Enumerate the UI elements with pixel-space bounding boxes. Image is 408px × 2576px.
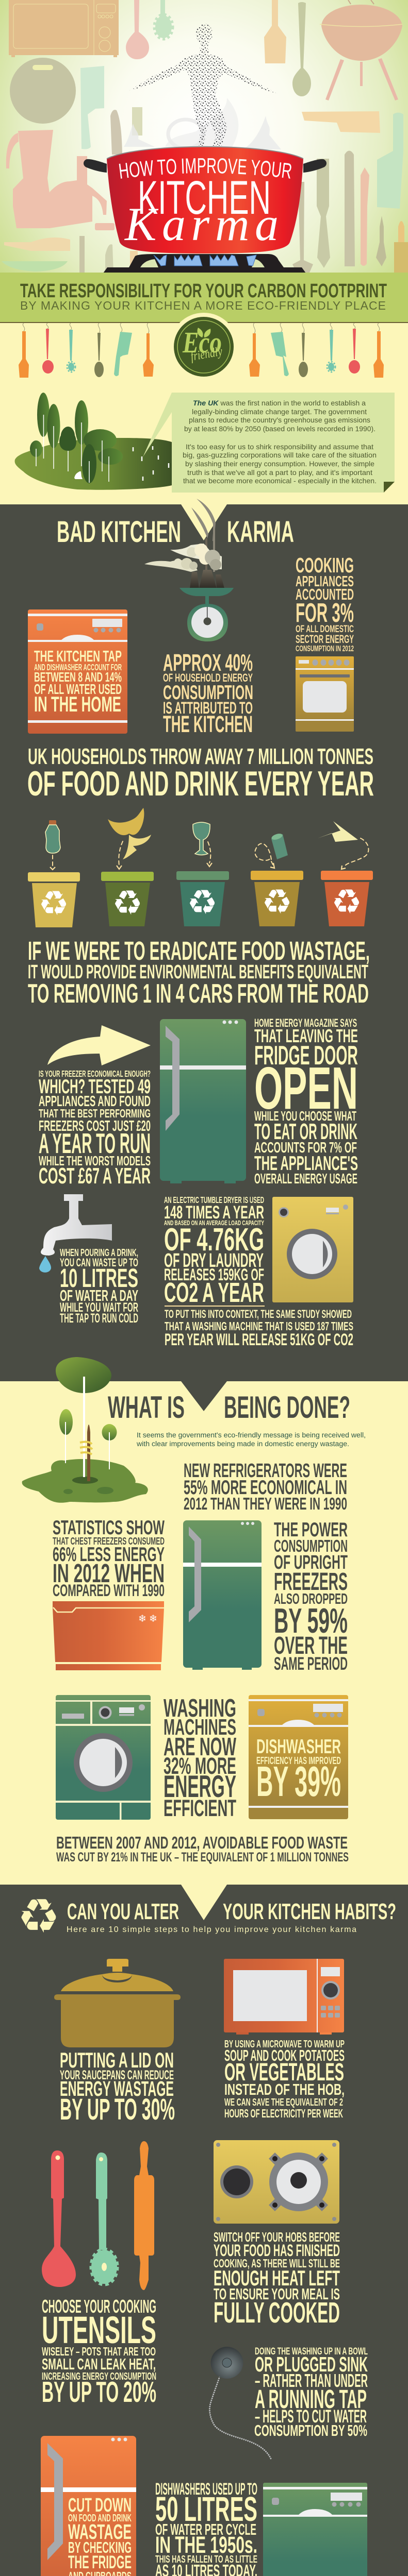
utensils text: SMALL CAN LEAK HEAT, [42,2355,156,2373]
steam rising from pot [124,98,281,149]
freezer text: WHICH? TESTED 49 [39,1076,151,1098]
hob [214,2140,339,2224]
saucepan text: BY UP TO 30% [60,2093,175,2126]
heading: KARMA [227,515,294,549]
rolling pin [134,2141,154,2290]
upright freezer statistic: FREEZERS [274,1568,348,1596]
body text: big, gas-guzzling corporations will take care of the situation [183,451,377,459]
pot title [119,158,291,250]
saucepan text: ENERGY WASTAGE [60,2077,174,2100]
freezer text: APPLIANCES AND FOUND [39,1093,151,1110]
yellow dishwasher with statistic: EFFICIENCY HAS IMPROVED [256,1755,341,1767]
upright freezer statistic: CONSUMPTION [274,1536,348,1555]
orange spatula right [373,331,384,378]
amber bin [251,871,303,926]
intro text: It seems the government's eco-friendly message is being received well, [137,1431,366,1439]
recycle icon: ♻ [18,1889,60,1944]
chest freezer statistic: 66% LESS ENERGY [53,1544,165,1566]
olive spoon right [299,333,308,377]
freezer text: IS YOUR FREEZER ECONOMICAL ENOUGH? [39,1069,151,1079]
orange fridge with wastage text: WASTAGE [68,2520,132,2544]
eradicate food wastage headline [28,936,370,1009]
chest freezer statistic: STATISTICS SHOW [53,1517,165,1539]
teal bin [176,871,229,926]
household energy statistic: APPROX 40% [163,649,253,676]
panel: UK climate speech bubble [143,393,395,493]
body text: that we become more economical - especially in the kitchen. [183,477,377,485]
utensil row behind pot, left [2,223,138,273]
teal gear left [67,330,75,372]
plug text [254,2346,368,2439]
yellow dishwasher with statistic: DISHWASHER [256,1736,341,1758]
teal gear right [327,330,335,372]
heading [67,1899,396,1924]
tumble dryer text: RELEASES 159KG OF [164,1265,264,1284]
upright freezer statistic: ALSO DROPPED [274,1591,348,1607]
cooking appliances statistic: CONSUMPTION IN 2012 [296,645,354,653]
panel: can you alter your kitchen habits dark section [0,1885,408,2576]
teal cleaver left [114,332,132,376]
washing machine statistic: MACHINES [164,1715,236,1740]
eco friendly badge: friendly [189,344,224,364]
yellow bin: ♻ [38,884,69,923]
washing machine statistic: 32% MORE [164,1753,236,1779]
body text: by slashing their energy consumption. However, the simple [185,460,374,468]
utensils text [42,2296,156,2409]
illustration: green landscape [15,393,172,490]
fridge door text [254,1016,358,1187]
chest freezer: ❄ [138,1613,146,1624]
body text: truth is that we've all got a part to play, and it's important [187,468,372,477]
freezer text: COST £67 A YEAR [39,1163,151,1189]
sub heading: Here are 10 simple steps to help you improve your kitchen karma [67,1925,356,1934]
saucepan text: PUTTING A LID ON [60,2048,174,2072]
dishwasher litres text: OF WATER PER CYCLE [155,2521,256,2538]
curved arrow [47,1025,151,1065]
orange dishwasher with tap statistic [28,609,127,734]
panel: green title band [0,273,408,323]
tap text: WHILE YOU WAIT FOR [60,1300,138,1315]
freezer text: A YEAR TO RUN [39,1127,151,1159]
orange spatula left [19,331,29,378]
washing machine statistic: EFFICIENT [164,1795,236,1821]
tap text: OF WATER A DAY [60,1287,138,1304]
tall trees [30,393,123,483]
orange spatula [264,0,286,63]
cutting board [10,58,76,124]
heading [108,1390,350,1425]
cooking appliances statistic: APPLIANCES [296,573,354,590]
orange slotted turner right [249,333,260,377]
saucepan text [60,2048,175,2126]
upright freezer statistic: BY 59% [274,1601,348,1640]
cooking appliances statistic: FOR 3% [296,598,354,628]
burner stand [103,254,306,273]
cooking appliances statistic [296,553,354,653]
cooking appliances statistic: COOKING [296,553,354,577]
saucepan with lid [54,1959,181,2047]
chest freezer [53,1601,164,1670]
tree illustration [22,1357,148,1503]
upright freezer statistic [274,1519,348,1674]
right orange cleaver [302,111,380,133]
falling waste items [45,808,368,870]
drinks can [271,833,288,859]
smoking factory on scale [144,499,234,641]
green washing machine [56,1695,151,1820]
pot title: Karma [124,198,279,250]
orange dishwasher with tap statistic: THE KITCHEN TAP [34,648,122,665]
pot title: HOW TO IMPROVE YOUR [119,158,291,179]
blender [6,130,53,228]
orange bin [321,871,373,926]
avoidable food waste statistic [56,1833,349,1865]
green bin [101,872,154,926]
paper plane [318,821,358,842]
microwave text: INSTEAD OF THE HOB, [224,2081,345,2098]
cooking appliances statistic: SECTOR ENERGY [296,633,354,646]
dishwasher litres text: IN THE 1950s. [155,2532,257,2558]
panel: can you alter your kitchen habits dark section: DISHWASHERS USED UP TO [155,2480,257,2498]
freezer text: WHILE THE WORST MODELS [39,1153,151,1168]
green fridge small [183,1520,262,1670]
orange dishwasher with tap statistic: AND DISHWASHER ACCOUNT FOR [34,662,122,672]
barbecue [320,0,402,100]
body text: plans to reduce the country's greenhouse gas emissions [189,416,370,424]
tap text [60,1247,138,1326]
body text: The UK was the first nation in the world to establish a [193,399,366,407]
orange slotted turner left [143,333,154,377]
orange fridge with wastage text: BY CHECKING [68,2539,132,2556]
freezer text: FREEZERS COST JUST £20 [39,1118,151,1134]
cooking appliances statistic: OF ALL DOMESTIC [296,624,354,635]
yellow dishwasher with statistic: BY 39% [256,1757,341,1805]
tap text: YOU CAN WASTE UP TO [60,1256,138,1269]
yellow washing machine [272,1197,353,1302]
red spoon [42,2150,76,2287]
upright freezer statistic: OF UPRIGHT [274,1552,348,1573]
tumble dryer text: AN ELECTRIC TUMBLE DRYER IS USED [164,1195,264,1205]
tumble dryer text [164,1195,353,1349]
freezer text [39,1069,151,1189]
heading: BAD KITCHEN [57,515,181,549]
kitchen scale [179,588,234,641]
tap text: 10 LITRES [60,1263,138,1293]
upright freezer statistic: OVER THE [274,1632,348,1659]
smoke clouds [144,544,222,572]
panel: what is being done cream section [22,1357,366,1865]
cooking utensils [42,2141,154,2290]
chest freezer statistic: THAT CHEST FREEZERS CONSUMED [53,1536,165,1547]
body text: It's too easy for us to shirk responsibility and assume that [186,443,373,451]
island ground [15,438,172,490]
pot handles [84,159,327,173]
hob text [214,2229,340,2329]
dishwasher litres text [155,2480,257,2576]
wine glass [193,822,210,855]
page fold [384,482,395,493]
orange bin: ♻ [331,882,362,922]
washing machine statistic [164,1694,236,1821]
yellow bin [28,872,80,927]
eco friendly badge: Eco [182,326,222,359]
orange dishwasher with tap statistic: OF ALL WATER USED [34,681,122,697]
tumble dryer text: 148 TIMES A YEAR [164,1202,264,1223]
green gear [154,0,173,39]
food processor [50,156,107,228]
background kitchen utensils [2,0,408,273]
dashed arrows [53,838,368,867]
refrigerators statistic [184,1460,347,1513]
sub headline: BY MAKING YOUR KITCHEN A MORE ECO-FRIENDLY PLACE [20,299,386,312]
tumble dryer text: CO2 A YEAR [164,1277,264,1308]
panel: hero header with pot [0,0,408,273]
household energy statistic: IS ATTRIBUTED TO [163,699,253,717]
washing machine statistic: ARE NOW [164,1733,236,1761]
panel: can you alter your kitchen habits dark section: CHOOSE YOUR COOKING [42,2296,156,2317]
utensils text: BY UP TO 20% [42,2376,156,2409]
utensils text: UTENSILS [42,2309,156,2351]
heading: CAN YOU ALTER [67,1899,179,1924]
household energy statistic: OF HOUSEHOLD ENERGY [163,671,253,684]
green fridge [160,1019,246,1183]
sink plug and chain [209,2347,271,2459]
orange fridge with wastage text: THE FRIDGE [68,2552,132,2572]
household energy statistic: THE KITCHEN [163,711,253,737]
pot title: KITCHEN [138,172,271,224]
particle figure [127,24,279,146]
yellow oven [296,656,354,732]
recycling bins [28,871,373,927]
upright freezer statistic: SAME PERIOD [274,1654,348,1674]
tumble dryer text: OF 4.76KG [164,1222,264,1258]
microwave silhouette [9,0,119,57]
red spoon right [349,329,360,374]
eco friendly badge [170,313,238,381]
teal bin: ♻ [187,883,218,922]
orange fridge with wastage text [41,2436,136,2576]
red spoon left [42,329,54,374]
green cleaver [80,66,104,149]
household energy statistic: CONSUMPTION [163,682,253,704]
orange dishwasher with tap statistic: IN THE HOME [34,692,121,716]
cooking appliances statistic: ACCOUNTED [296,586,354,603]
yellow dishwasher with statistic [249,1695,348,1819]
washing machine statistic: ENERGY [164,1769,236,1804]
tumble dryer text: AND BASED ON AN AVERAGE LOAD CAPACITY [164,1219,264,1227]
dishwasher litres text: 50 LITRES [155,2490,257,2529]
green dishwasher [263,2483,367,2576]
upright freezer statistic: THE POWER [274,1519,348,1541]
intro text: with clear improvements being made in domestic energy wastage. [136,1440,349,1448]
intro text [136,1431,366,1448]
olive spoon left [94,333,104,377]
chest freezer statistic: IN 2012 WHEN [53,1558,165,1588]
body text: by at least 80% by 2050 (based on levels recorded in 1990). [184,425,376,433]
teal gear utensil [91,2153,118,2285]
body text [183,399,377,485]
chest freezer: ❄ [149,1613,157,1624]
teal cleaver right [271,332,289,376]
chest freezer statistic [53,1517,165,1600]
heading: WHAT IS [108,1390,185,1425]
orange dishwasher with tap statistic: BETWEEN 8 AND 14% [34,669,122,685]
chest freezer statistic: COMPARED WITH 1990 [53,1581,165,1600]
body text: legally-binding climate change target. The government [192,408,367,416]
saucepan text: YOUR SAUCEPANS CAN REDUCE [60,2068,174,2082]
tan knife [110,110,122,155]
amber bin: ♻ [262,882,292,922]
tumble dryer text: OF DRY LAUNDRY [164,1250,264,1272]
dishwasher litres text: THIS HAS FALLEN TO AS LITTLE [155,2554,257,2565]
knives and forks, right [292,150,408,273]
household energy statistic [163,649,253,737]
washing machine statistic: WASHING [164,1694,236,1722]
orange fridge with wastage text: CUT DOWN [68,2495,132,2516]
right green cleaver [377,112,403,209]
banana peel [108,808,151,859]
red cooking pot [84,146,327,253]
rabbit [74,471,83,479]
food waste headline [27,744,374,803]
tap text: WHEN POURING A DRINK, [60,1247,138,1259]
panel: bad kitchen karma dark section [0,499,408,1381]
green bin: ♻ [112,883,143,923]
dripping tap [39,1194,112,1273]
fork [132,107,142,135]
utensils text: WISELEY – POTS THAT ARE TOO [42,2345,156,2358]
tree stems [36,415,169,483]
orange fridge with wastage text: ON FOOD AND DRINK [68,2513,132,2524]
pink spoon [126,0,149,59]
microwave text [224,2039,345,2120]
grey spoon [292,2,311,96]
freezer text: THAT THE BEST PERFORMING [39,1107,151,1120]
utensils text: INCREASING ENERGY CONSUMPTION [42,2371,156,2382]
hanging utensils row [19,323,384,378]
tap text: THE TAP TO RUN COLD [60,1311,138,1326]
plastic bottle [45,820,60,853]
microwave [224,1959,344,2035]
